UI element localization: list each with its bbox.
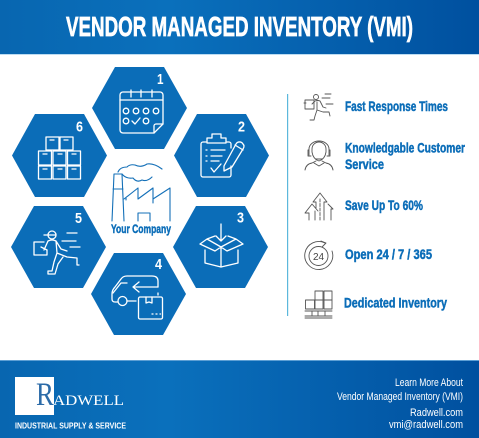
panel: hexagon 4 delivery van — [91, 253, 186, 335]
benefit: fast response times — [304, 94, 448, 120]
icon: van and box — [112, 276, 162, 319]
logo: radwell — [15, 377, 126, 430]
icon: box with arrow — [200, 224, 243, 267]
header banner — [0, 0, 479, 55]
benefit: knowledgable customer service — [305, 140, 466, 172]
icon: up arrows — [305, 193, 333, 220]
icon: calendar — [120, 90, 163, 133]
icon: factory, your company — [111, 164, 171, 236]
icon: 24 hour clock: 24 — [313, 252, 324, 263]
benefit: open 24/7/365 — [305, 241, 432, 270]
panel: hexagon 2 order: 2 — [238, 118, 245, 136]
panel: hexagon 5 dispatch runner — [11, 206, 106, 288]
benefit: dedicated inventory: Dedicated Inventory — [344, 296, 447, 310]
contact text: Radwell.com — [410, 407, 463, 419]
icon: running courier — [34, 231, 80, 274]
benefit: save up to 60%: Save Up To 60% — [345, 198, 423, 213]
icon: stacked boxes — [38, 137, 80, 179]
icon: runner — [304, 94, 333, 120]
icon: headset agent — [305, 141, 333, 170]
contact text: vmi@radwell.com — [389, 419, 463, 431]
vertical divider — [287, 94, 288, 316]
panel: hexagon 4 delivery van: 4 — [155, 256, 163, 273]
logo: radwell: INDUSTRIAL SUPPLY & SERVICE — [15, 420, 126, 430]
panel: hexagon 1 schedule — [92, 67, 187, 149]
panel: hexagon 6 inventory boxes — [12, 114, 107, 197]
label: your company: Your Company — [111, 224, 171, 236]
panel: hexagon 1 schedule: 1 — [157, 71, 164, 88]
panel: hexagon 5 dispatch runner: 5 — [75, 210, 82, 227]
contact text — [337, 377, 463, 431]
panel: hexagon 2 order — [174, 114, 269, 197]
benefit: open 24/7/365: Open 24 / 7 / 365 — [345, 247, 432, 262]
icon: pallet of boxes — [305, 291, 332, 318]
benefit: dedicated inventory — [305, 291, 447, 318]
panel: hexagon 6 inventory boxes: 6 — [76, 118, 83, 136]
panel: hexagon 3 receive — [173, 206, 268, 288]
benefit: save up to 60% — [305, 193, 423, 220]
benefit: knowledgable customer service: Service — [345, 157, 384, 172]
icon: clipboard and pen — [201, 134, 244, 177]
logo: radwell: ADWELL — [53, 393, 124, 409]
footer banner — [0, 360, 479, 438]
panel: hexagon 3 receive: 3 — [237, 210, 244, 226]
logo: radwell: R — [36, 377, 54, 413]
